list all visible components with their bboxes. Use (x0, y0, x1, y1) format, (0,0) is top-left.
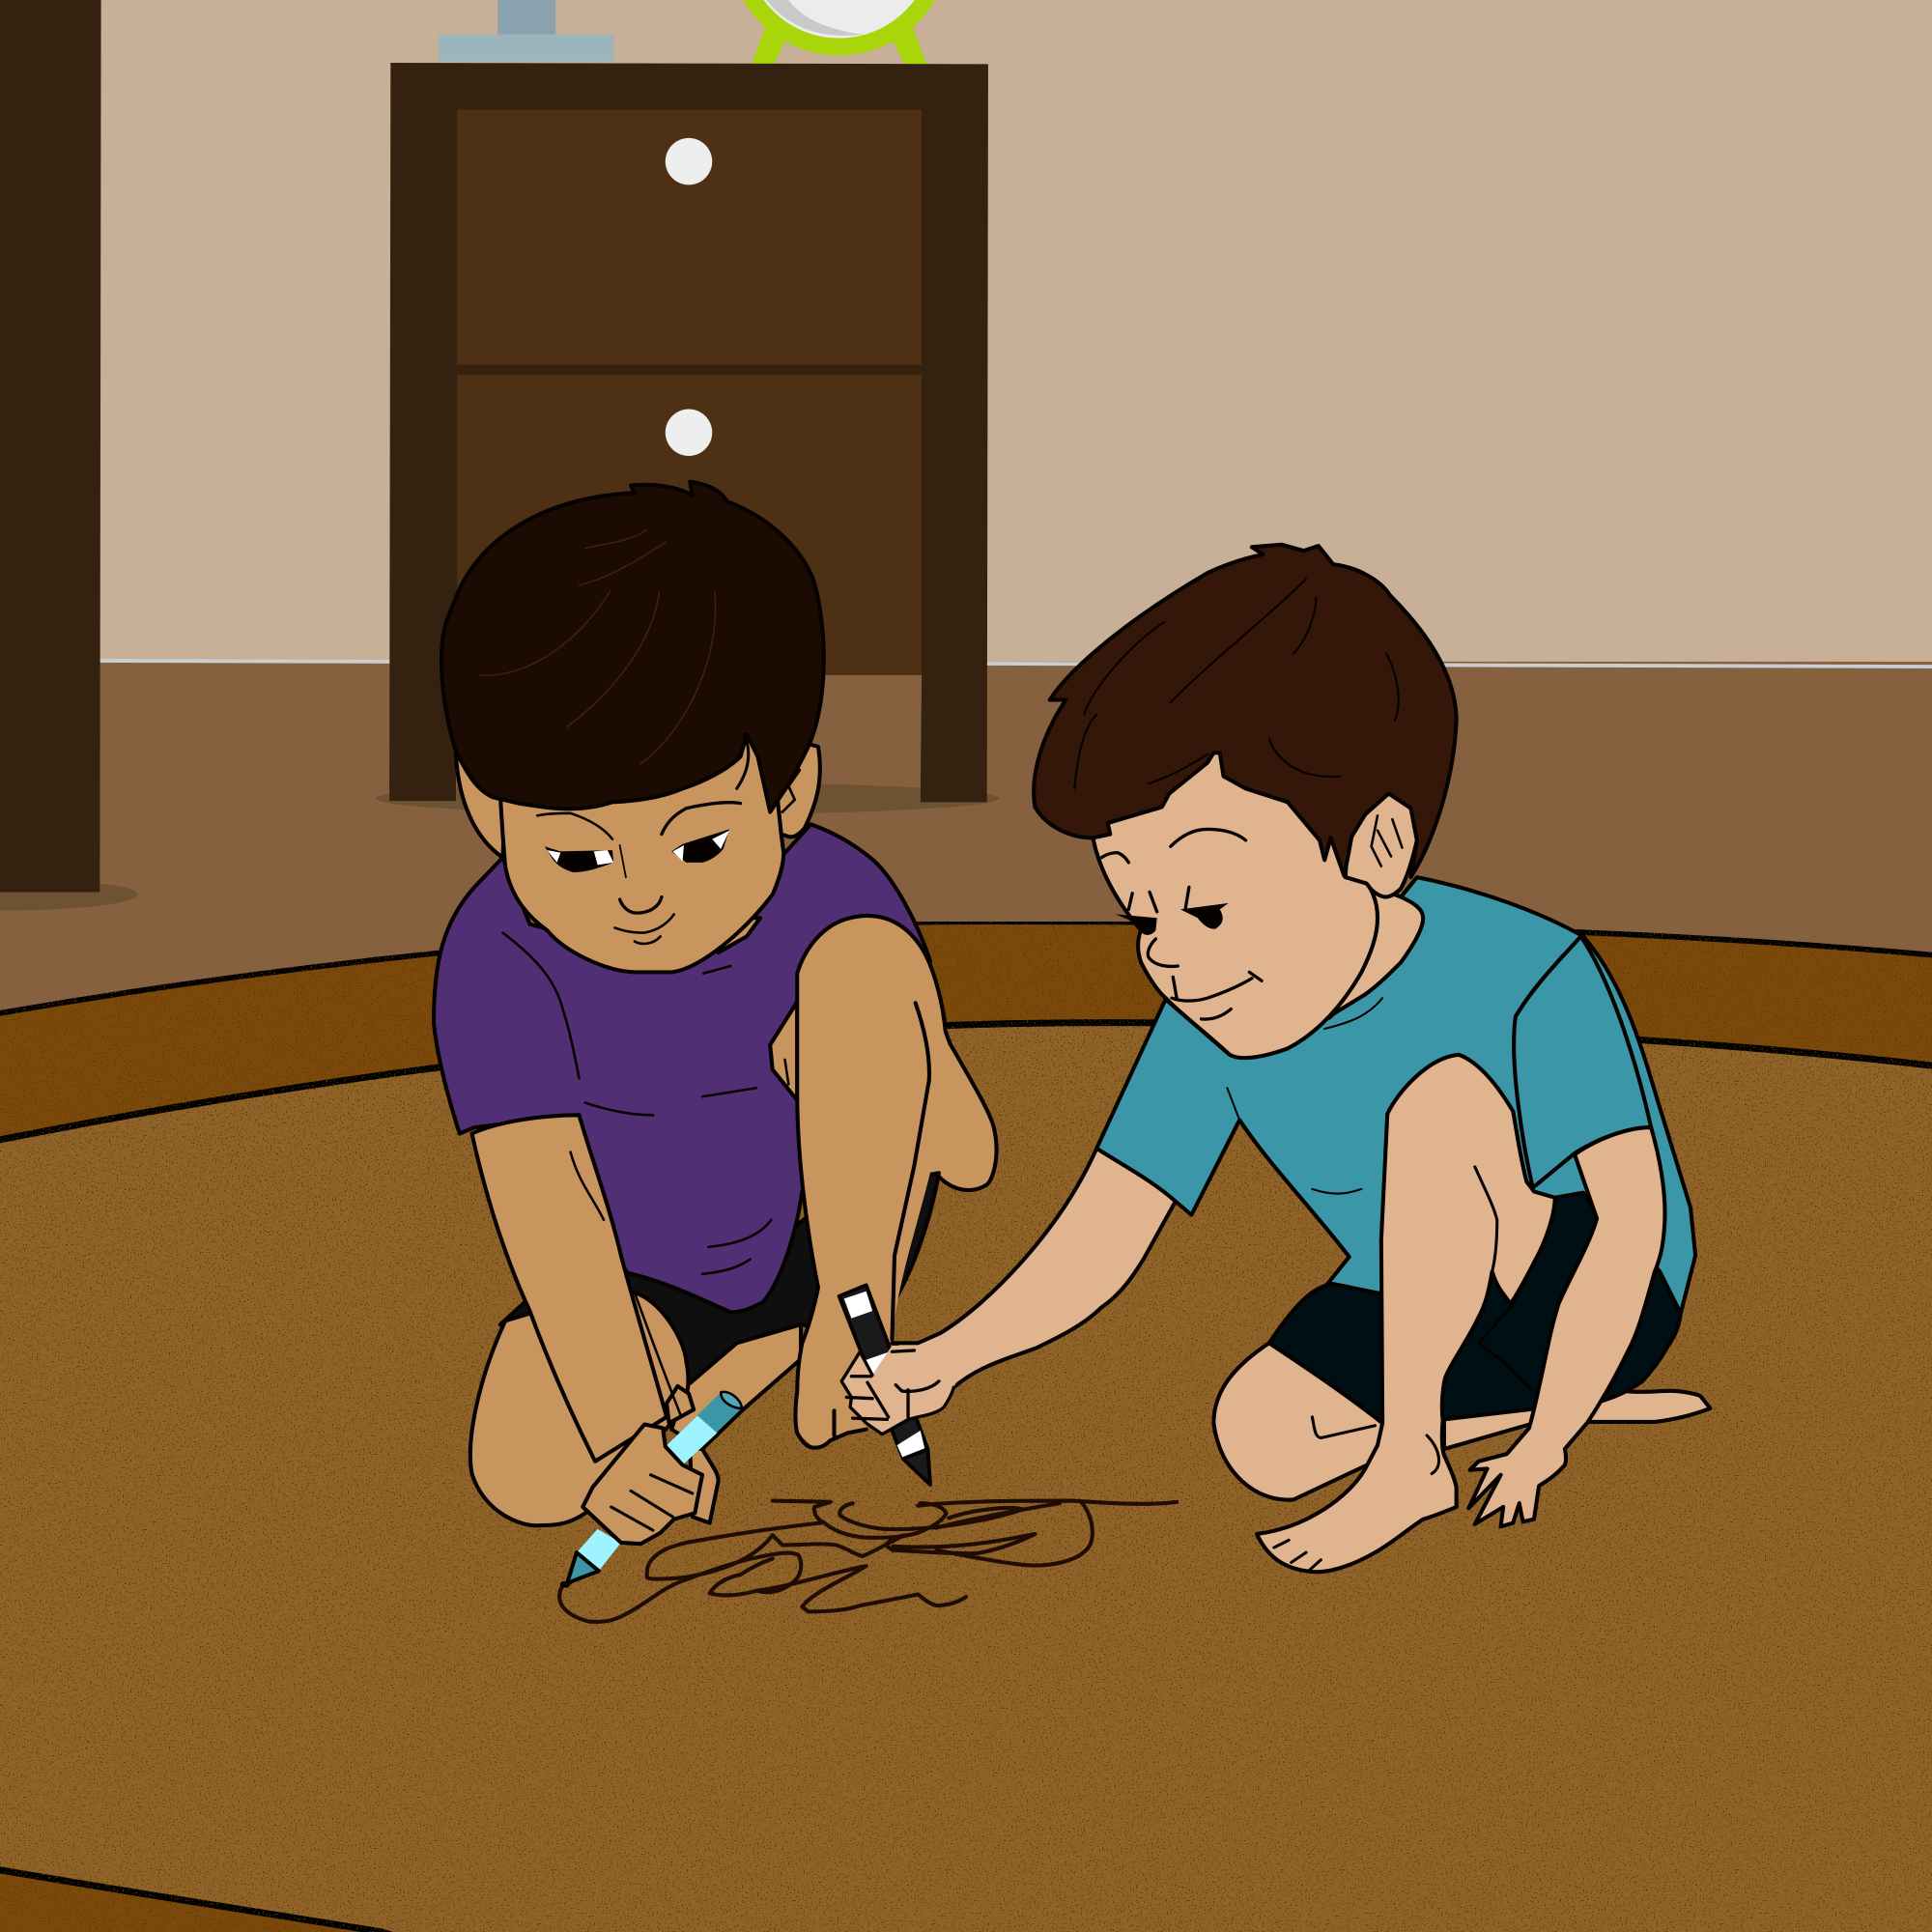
small finger behind marker (667, 1386, 694, 1423)
black marker and hand (839, 1285, 956, 1485)
boy in purple shirt (434, 482, 997, 1525)
shorts (500, 1171, 939, 1387)
hair (1034, 545, 1457, 877)
neck (719, 918, 760, 952)
eyes and facial features (537, 734, 749, 944)
marker body (839, 1285, 927, 1459)
fist (841, 1337, 956, 1435)
ears (456, 744, 820, 858)
rug (0, 922, 1932, 1932)
floor (0, 661, 1932, 1154)
hair strands and clothing folds (1074, 579, 1562, 1194)
marker cap (844, 1292, 872, 1319)
dresser (376, 63, 999, 814)
marker band (865, 1351, 890, 1375)
facial features (1101, 815, 1403, 1019)
shorts (1269, 1193, 1681, 1423)
left arm (892, 1149, 1176, 1387)
blue marker and hand (563, 1392, 742, 1584)
right arm and hand (1468, 1127, 1665, 1526)
neck (1329, 884, 1423, 1018)
drawer knob top (666, 138, 712, 185)
marker tip (903, 1449, 930, 1485)
marker lower band (897, 1431, 925, 1459)
front leg (795, 916, 947, 1448)
door frame post (0, 0, 138, 911)
shirt (1096, 877, 1695, 1314)
face (499, 727, 783, 972)
toes and front leg inner lines (1274, 1167, 1497, 1571)
right sleeve (1514, 936, 1651, 1188)
left leg (470, 1293, 688, 1525)
scribble drawing on rug (559, 1501, 1177, 1622)
wall (0, 0, 1932, 666)
ear inner detail (782, 770, 800, 812)
ear (1346, 793, 1417, 897)
drawer knob bottom (666, 409, 712, 456)
items on dresser: stand and clock (439, 0, 941, 64)
shorts inner lines (1479, 1220, 1552, 1391)
hair (441, 482, 824, 812)
boy in teal shirt (892, 545, 1710, 1572)
thumb behind marker (690, 1448, 719, 1523)
clothing folds and hand lines (502, 933, 788, 1417)
marker body (666, 1392, 742, 1465)
back calf (1444, 1391, 1534, 1449)
hand (582, 1424, 702, 1544)
shirt (434, 824, 930, 1312)
back foot (1565, 1391, 1710, 1422)
back foot (914, 974, 997, 1190)
lower leg (671, 1324, 801, 1449)
left knee (1213, 1343, 1382, 1500)
hair strands (480, 529, 716, 764)
arm (472, 1115, 667, 1462)
calf behind shirt (770, 1002, 797, 1100)
face (1093, 739, 1378, 1058)
front leg and foot (1257, 1055, 1555, 1572)
